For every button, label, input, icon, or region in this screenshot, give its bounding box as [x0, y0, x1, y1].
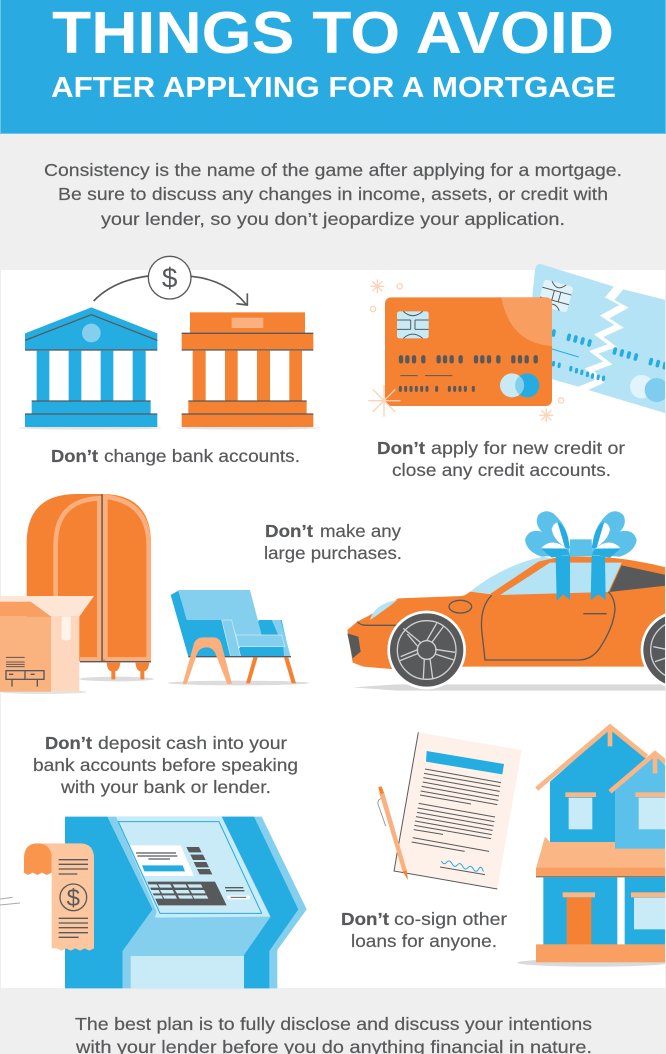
title: THINGS TO AVOID [52, 0, 614, 66]
intro text: Consistency is the name of the game after applying for a mortgage. [44, 160, 622, 180]
label: credit: close any credit accounts. [392, 460, 611, 480]
label: co-sign: co-sign other [394, 909, 507, 929]
label: deposits: Don’t [45, 733, 92, 753]
label: purchases [264, 521, 402, 563]
label: co-sign [341, 909, 507, 951]
label: co-sign: loans for anyone. [351, 931, 497, 951]
label: bank accounts: Don’t [51, 446, 98, 466]
icon: credit cards [368, 264, 666, 422]
footer text: The best plan is to fully disclose and discuss your intentions [75, 1014, 592, 1034]
icon: banks with dollar transfer [18, 256, 320, 430]
label: deposits [33, 733, 298, 797]
label: credit [377, 438, 625, 480]
header banner: AFTER APPLYING FOR A MORTGAGE [51, 72, 616, 104]
icon: car with bow [347, 511, 666, 691]
footer text [75, 1014, 592, 1054]
label: bank accounts: change bank accounts. [104, 446, 300, 466]
label: purchases: make any [320, 521, 401, 541]
icon: wardrobe, box and armchair [0, 494, 309, 694]
intro text [44, 160, 622, 229]
icon: house [517, 727, 666, 967]
icon: ATM with receipt [0, 817, 307, 988]
header banner [0, 0, 666, 134]
label: deposits: bank accounts before speaking [33, 755, 298, 775]
intro text: Be sure to discuss any changes in income, assets, or credit with [58, 184, 608, 204]
intro text: your lender, so you don’t jeopardize your application. [101, 209, 565, 229]
label: credit: apply for new credit or [431, 438, 625, 458]
icon: ATM with receipt: $ [67, 885, 80, 912]
label: deposits: deposit cash into your [98, 733, 287, 753]
white panel [1, 270, 665, 988]
label: co-sign: Don’t [341, 909, 389, 929]
label: credit: Don’t [377, 438, 425, 458]
icon: banks with dollar transfer: $ [162, 262, 178, 293]
label: purchases: large purchases. [264, 543, 402, 563]
label: purchases: Don’t [265, 521, 313, 541]
label: deposits: with your bank or lender. [60, 777, 271, 797]
icon: signed document and pencil [378, 732, 522, 889]
